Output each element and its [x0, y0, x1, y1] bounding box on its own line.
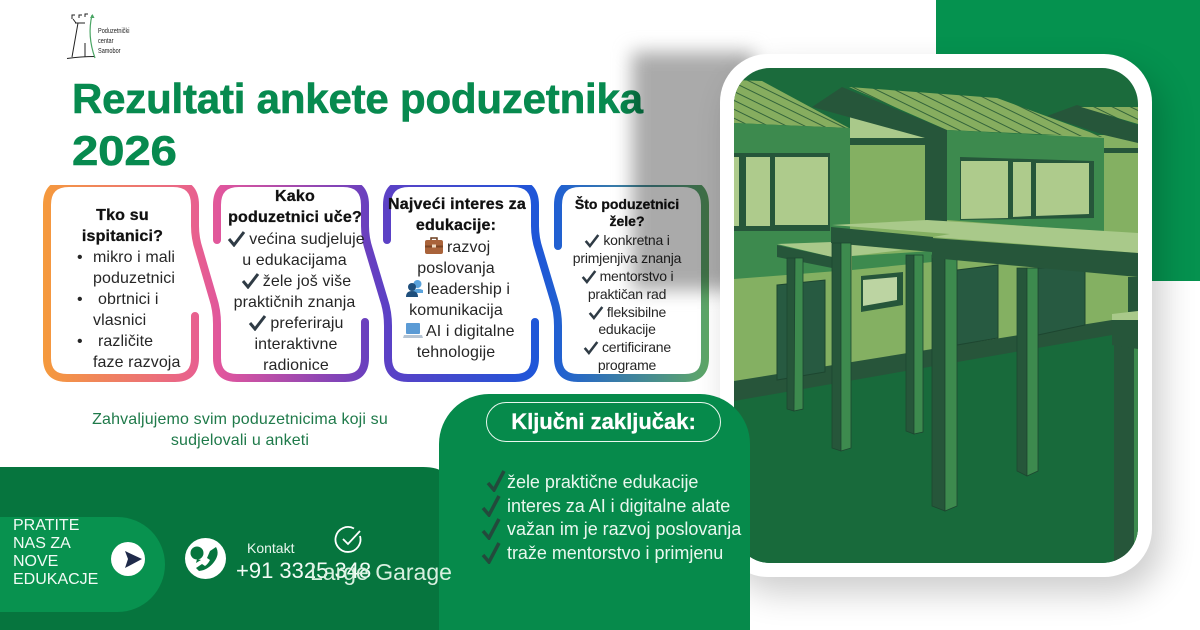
- photo shadow: [632, 52, 754, 290]
- follow pill: EDUKACJE: [13, 571, 98, 588]
- card 4: Što poduzetnici žele: Što poduzetnici: [575, 196, 679, 212]
- icon: check circle: [334, 526, 362, 553]
- icon: phone: [185, 538, 226, 579]
- card 3: Najveći interes za edukacije: poslovanja: [417, 260, 495, 277]
- footer band: [0, 467, 441, 630]
- card 4: Što poduzetnici žele: programe: [598, 357, 656, 373]
- follow pill: [0, 517, 165, 612]
- card 4: Što poduzetnici žele: žele?: [609, 213, 644, 229]
- panel: key conclusion: [439, 394, 750, 630]
- icon: play button: [111, 542, 145, 576]
- icon: laptop: [403, 323, 423, 338]
- card 2: Kako poduzetnici uče: preferiraju: [270, 315, 344, 332]
- logo: Samobor: [98, 46, 121, 55]
- card 2: Kako poduzetnici uče: praktičnih znanja: [234, 294, 355, 311]
- card 3: Najveći interes za edukacije: AI i digitalne: [426, 323, 515, 340]
- card 4: Što poduzetnici žele: primjenjiva znanja: [573, 250, 681, 266]
- icon: briefcase: [425, 237, 443, 254]
- card 2: Kako poduzetnici uče: žele još više: [263, 273, 351, 290]
- card 1: Tko su ispitanici: ispitanici?: [82, 228, 163, 245]
- card 1: Tko su ispitanici: [77, 207, 180, 371]
- follow pill: NOVE: [13, 553, 58, 570]
- overlapping name: Large Garage: [310, 559, 452, 585]
- center building: [947, 130, 1104, 232]
- card 1: Tko su ispitanici: vlasnici: [93, 312, 146, 329]
- card 4: Što poduzetnici žele: [573, 196, 682, 373]
- card 4: Što poduzetnici žele: praktičan rad: [588, 286, 666, 302]
- left building: [734, 123, 850, 279]
- logo: Poduzetnički: [98, 26, 129, 35]
- card 4: Što poduzetnici žele: mentorstvo i: [600, 268, 673, 284]
- center roof: [849, 87, 1103, 137]
- beams: [832, 220, 1138, 253]
- icon: people: [406, 280, 423, 297]
- thank-you note: Zahvaljujemo svim poduzetnicima koji su: [92, 411, 388, 428]
- card 3: Najveći interes za edukacije: razvoj: [447, 239, 490, 256]
- front right post: [1114, 345, 1134, 563]
- card 1: Tko su ispitanici: različite: [98, 333, 153, 350]
- logo: centar: [98, 36, 113, 45]
- card 1: Tko su ispitanici: mikro i mali: [93, 249, 175, 266]
- card 3: Najveći interes za edukacije: [388, 196, 526, 361]
- photo frame with house illustration: [720, 54, 1152, 577]
- contact number: +91 3325 348: [236, 558, 371, 583]
- lower wall: [734, 135, 1138, 390]
- card 4: Što poduzetnici žele: fleksibilne: [607, 304, 666, 320]
- title: Rezultati ankete poduzetnika: [72, 75, 643, 122]
- conclusion list: traže mentorstvo i primjenu: [507, 543, 723, 563]
- doors and window: [777, 280, 825, 380]
- card 2: Kako poduzetnici uče: u edukacijama: [242, 252, 347, 269]
- contact label: Kontakt: [247, 540, 294, 556]
- top right green block: [936, 0, 1200, 281]
- card 2: Kako poduzetnici uče: poduzetnici uče?: [228, 209, 362, 226]
- card 2: Kako poduzetnici uče: [228, 188, 365, 374]
- card 2: Kako poduzetnici uče: interaktivne: [254, 336, 338, 353]
- conclusion list: interes za AI i digitalne alate: [507, 496, 730, 516]
- card 1: Tko su ispitanici: •: [77, 333, 83, 350]
- survey cards outlines: [43, 185, 709, 382]
- center gable: [812, 87, 947, 222]
- card 4: Što poduzetnici žele: edukacije: [598, 321, 656, 337]
- thank-you note: [92, 411, 388, 449]
- thank-you note: sudjelovali u anketi: [171, 432, 309, 449]
- card 1: Tko su ispitanici: obrtnici i: [98, 291, 159, 308]
- card 3: Najveći interes za edukacije: leadership i: [427, 281, 510, 298]
- light patch behind gable: [850, 112, 925, 138]
- follow pill: NAS ZA: [13, 535, 71, 552]
- follow pill: PRATITE: [13, 517, 79, 534]
- card 4: Što poduzetnici žele: certificirane: [602, 339, 671, 355]
- card 3: Najveći interes za edukacije: Najveći interes za: [388, 196, 526, 213]
- logo: [66, 14, 130, 59]
- title: [72, 75, 644, 174]
- left roof: [734, 80, 849, 128]
- card 2: Kako poduzetnici uče: Kako: [275, 188, 315, 205]
- card 2: Kako poduzetnici uče: većina sudjeluje: [249, 231, 365, 248]
- card 1: Tko su ispitanici: Tko su: [96, 207, 149, 224]
- conclusion heading: Ključni zaključak:: [511, 409, 696, 434]
- conclusion list: žele praktične edukacije: [507, 472, 698, 492]
- conclusion list: važan im je razvoj poslovanja: [507, 519, 741, 539]
- card 3: Najveći interes za edukacije: tehnologije: [417, 344, 495, 361]
- conclusion heading: [486, 402, 721, 442]
- card 3: Najveći interes za edukacije: edukacije:: [416, 217, 496, 234]
- card 3: Najveći interes za edukacije: komunikacija: [409, 302, 503, 319]
- right gable: [1047, 105, 1138, 143]
- card 1: Tko su ispitanici: faze razvoja: [93, 354, 180, 371]
- posts: [787, 243, 1038, 511]
- card 4: Što poduzetnici žele: konkretna i: [603, 232, 670, 248]
- card 1: Tko su ispitanici: •: [77, 249, 83, 266]
- card 1: Tko su ispitanici: •: [77, 291, 83, 308]
- conclusion list: [482, 470, 742, 564]
- title: 2026: [72, 127, 177, 174]
- card 2: Kako poduzetnici uče: radionice: [263, 357, 329, 374]
- card 1: Tko su ispitanici: poduzetnici: [93, 270, 175, 287]
